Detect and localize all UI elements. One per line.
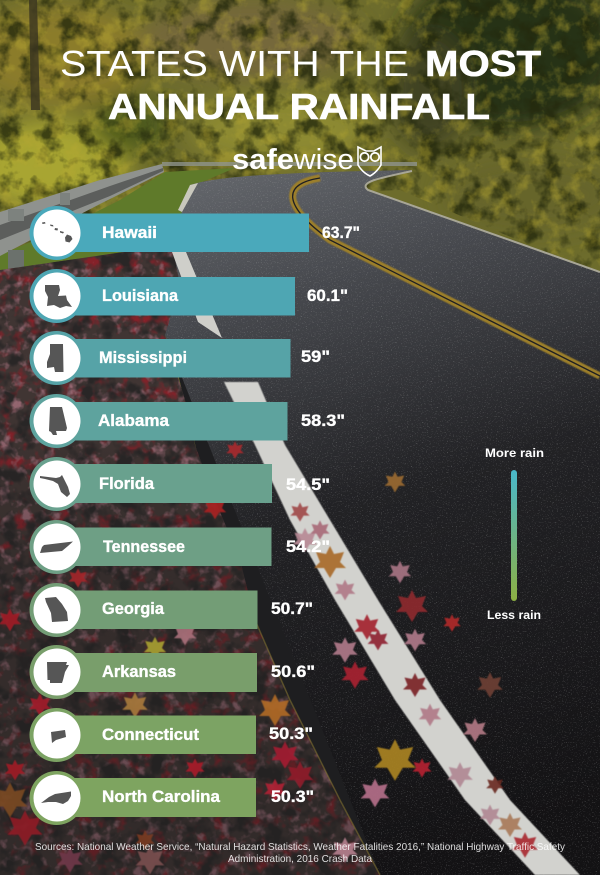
icon: Florida [40, 475, 70, 497]
row: Florida [30, 457, 330, 511]
legend: rainfall scale: Less rain [487, 608, 541, 622]
icon: Tennessee [40, 542, 73, 553]
row: Tennessee [30, 520, 330, 574]
row: Hawaii: 63.7" [322, 224, 360, 242]
logo: safewise owl: safe [232, 144, 294, 176]
title: STATES WITH THE [60, 43, 409, 84]
row: North Carolina: 50.3" [271, 788, 314, 806]
row: Louisiana: 60.1" [307, 287, 348, 305]
row: Louisiana [30, 269, 348, 323]
title [60, 43, 541, 127]
row: Georgia: Georgia [102, 600, 165, 618]
row: Mississippi [30, 331, 330, 385]
sources footnote: Administration, 2016 Crash Data [228, 853, 372, 865]
row: Georgia: 50.7" [271, 600, 313, 618]
icon: Louisiana [45, 285, 72, 308]
row: Arkansas [30, 645, 315, 699]
row: Alabama [30, 394, 345, 448]
row: Connecticut: 50.3" [269, 725, 313, 743]
icon: Arkansas [47, 662, 69, 683]
row: North Carolina: North Carolina [102, 788, 221, 806]
icon: Hawaii [42, 222, 72, 242]
row: Tennessee: 54.2" [286, 538, 330, 556]
sources footnote: Sources: National Weather Service, “Natural Hazard Statistics, Weather Fatalities 2016,” National Highway Traffic Safety [35, 841, 566, 853]
row: Florida: 54.5" [286, 476, 330, 494]
legend: rainfall scale: More rain [485, 446, 544, 460]
icon: Georgia [45, 597, 68, 622]
sources footnote [35, 841, 566, 865]
row: Connecticut [30, 708, 313, 762]
row: Hawaii [30, 206, 360, 260]
icon: North Carolina [41, 792, 71, 804]
legend: rainfall scale [485, 446, 544, 622]
row: Alabama: Alabama [98, 412, 170, 430]
row: Arkansas: 50.6" [271, 663, 315, 681]
icon: Connecticut [51, 730, 66, 743]
row: Tennessee: Tennessee [103, 538, 185, 556]
row: Louisiana: Louisiana [102, 287, 179, 305]
row: Arkansas: Arkansas [102, 663, 176, 681]
row: Mississippi: Mississippi [99, 349, 187, 367]
title: ANNUAL RAINFALL [108, 86, 490, 127]
row: Alabama: 58.3" [301, 412, 345, 430]
title: MOST [425, 43, 541, 84]
row: Hawaii: Hawaii [102, 224, 157, 242]
icon: Mississippi [47, 344, 64, 372]
row: North Carolina [30, 771, 314, 825]
row: Mississippi: 59" [301, 348, 330, 366]
logo: safewise owl: wise [293, 144, 354, 176]
row: Georgia [30, 583, 313, 637]
row: Florida: Florida [99, 475, 155, 493]
row: Connecticut: Connecticut [102, 726, 200, 744]
logo: safewise owl [232, 144, 381, 176]
icon: Alabama [49, 407, 67, 435]
